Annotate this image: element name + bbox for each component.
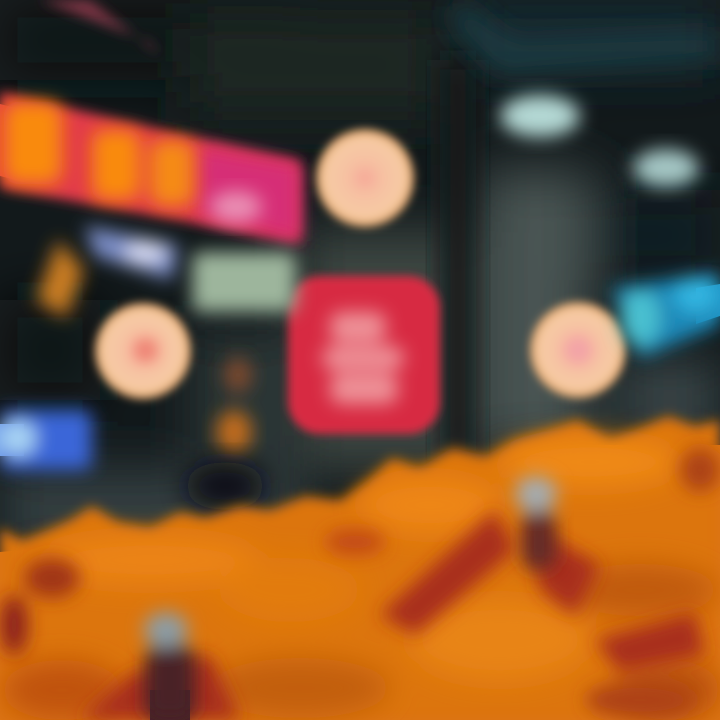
sign: pale blue panel — [85, 226, 178, 280]
sign: round peach top — [316, 129, 414, 227]
banner light characters — [210, 191, 262, 223]
sign: blue left — [0, 410, 92, 470]
lantern: orange left — [36, 240, 84, 318]
sign: round peach right — [530, 302, 626, 398]
sign: round peach left — [95, 303, 191, 399]
figure: left grey — [144, 612, 195, 720]
sign: red rounded square — [288, 276, 440, 434]
sign: neon banner — [0, 92, 300, 242]
banner orange blocks — [4, 102, 194, 206]
red sign glyph — [322, 312, 404, 404]
mound highlights — [2, 438, 720, 720]
sign: pale green panel — [192, 252, 296, 312]
sign: cyan right — [612, 272, 720, 358]
lantern: orange centre — [216, 357, 252, 454]
figure: right grey — [515, 476, 557, 570]
light: upper lamp — [500, 95, 580, 137]
mound red patches — [0, 448, 720, 720]
light: right lamp — [633, 149, 699, 187]
foreground: orange mound — [0, 416, 720, 720]
dark shadow above mound — [185, 462, 265, 510]
